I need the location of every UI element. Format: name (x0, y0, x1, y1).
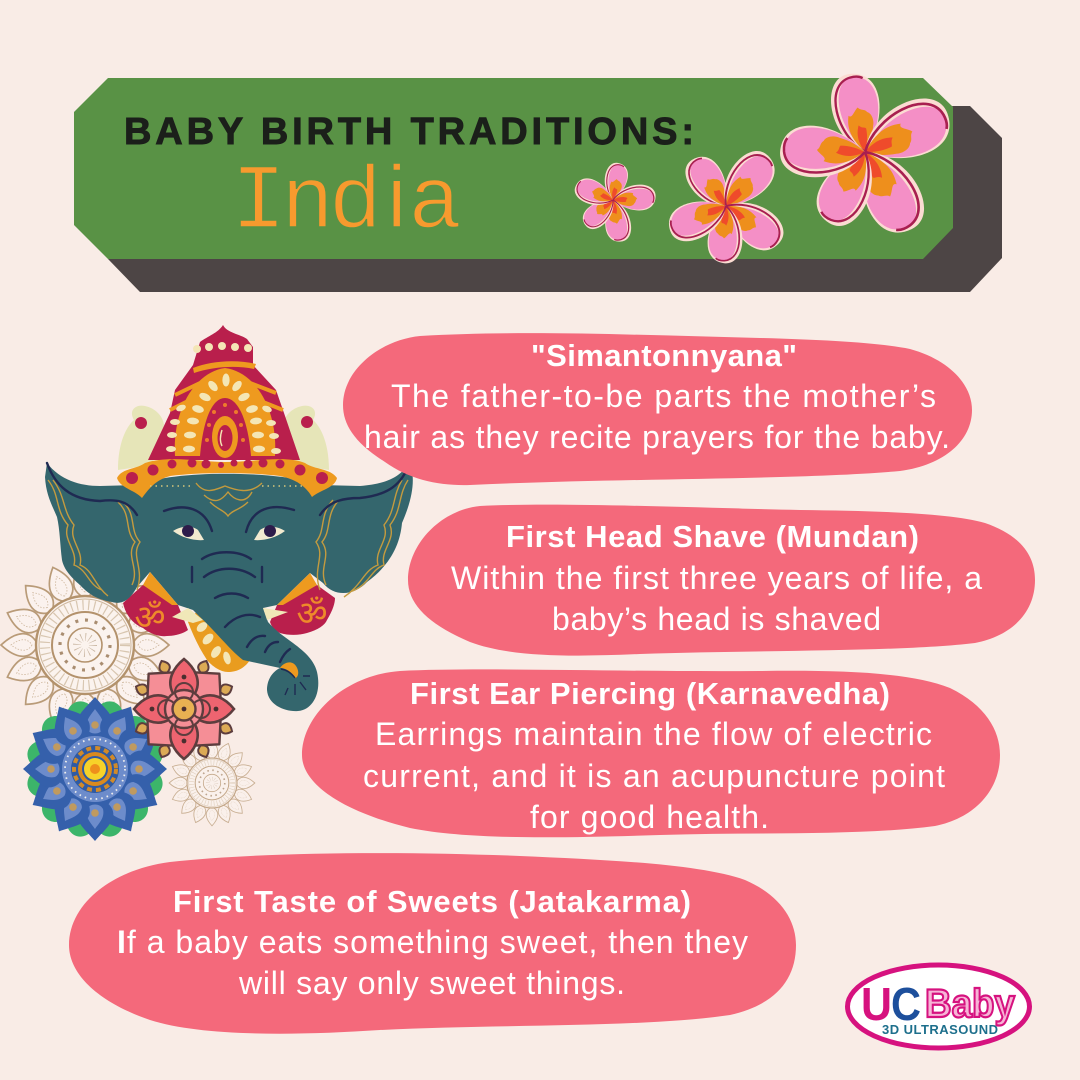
crown (148, 325, 300, 460)
ear ornaments (48, 480, 408, 597)
panel: First Ear Piercing: current, and it is an acupuncture point (363, 758, 945, 794)
logo: UC Baby 3D Ultrasound (848, 965, 1030, 1048)
panel: First Head Shave: baby’s head is shaved (552, 601, 881, 637)
panel: Simantonnyana: "Simantonnyana" (531, 338, 797, 373)
heading: India: ndia (283, 147, 459, 246)
panel: First Head Shave: First Head Shave (Mundan) (506, 519, 919, 554)
red cheeks with om symbols: ॐ (134, 598, 166, 638)
logo: UC Baby 3D Ultrasound: C (891, 978, 921, 1030)
red cheeks with om symbols (123, 585, 335, 638)
icon: medium flower (645, 125, 814, 291)
tusk necklace (188, 610, 250, 672)
panel: Simantonnyana: The father-to-be parts the mother’s (391, 378, 936, 414)
logo: UC Baby 3D Ultrasound: Baby (925, 982, 1016, 1026)
banner green plate (74, 78, 953, 259)
panel: Simantonnyana (343, 333, 972, 485)
panel: First Ear Piercing: Earrings maintain the flow of electric (375, 716, 932, 752)
mandala: small beige (133, 704, 291, 862)
tusks (172, 608, 288, 623)
crown side ornaments (118, 406, 329, 470)
logo: UC Baby 3D Ultrasound: 3D ULTRASOUND (882, 1022, 998, 1037)
head and trunk (45, 462, 413, 711)
panel: First Head Shave: Within the first three years of life, a (451, 560, 982, 596)
panel: Simantonnyana: hair as they recite prayers for the baby. (364, 419, 950, 455)
trunk tip (280, 662, 310, 695)
panel: First Ear Piercing: First Ear Piercing (Karnavedha) (410, 676, 890, 711)
icon: large flower (778, 71, 958, 242)
panel: First Taste of Sweets: will say only sweet things. (238, 965, 625, 1001)
heading: Baby Birth Traditions: BABY BIRTH TRADITIONS: (124, 111, 694, 153)
mandala: large beige (0, 490, 240, 800)
title banner (74, 71, 1002, 292)
banner shadow (108, 106, 1002, 292)
red cheeks with om symbols: ॐ (296, 594, 328, 634)
panel: First Ear Piercing (302, 669, 1000, 837)
ear, brow and trunk lines (47, 462, 410, 662)
mandala: blue and green (10, 684, 180, 854)
eyes (173, 525, 285, 540)
cheek orange trim (143, 572, 317, 605)
panel: First Taste of Sweets: If a baby eats something sweet, then they (117, 924, 748, 960)
logo: UC Baby 3D Ultrasound: U (861, 978, 892, 1030)
mandala: red lotus (134, 659, 234, 759)
panel: First Head Shave (408, 505, 1035, 656)
crown band (117, 458, 337, 498)
heading: India: I (231, 150, 286, 255)
illustration: Ganesha elephant head (45, 325, 413, 711)
panel: First Taste of Sweets (69, 853, 796, 1034)
panel: First Ear Piercing: for good health. (530, 799, 769, 835)
panel: First Taste of Sweets: First Taste of Sweets (Jatakarma) (173, 884, 691, 919)
forehead ornament (150, 483, 305, 516)
icon: small flower (560, 150, 667, 255)
